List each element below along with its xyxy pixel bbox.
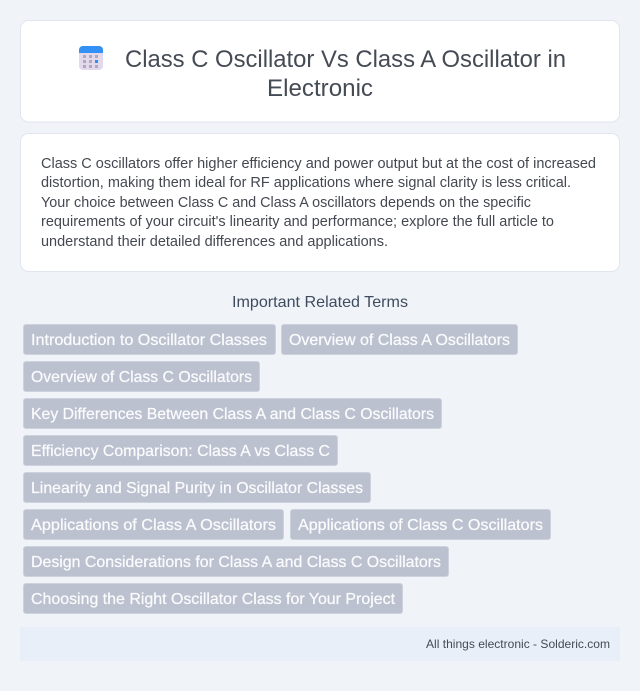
tag: overview class A: Overview of Class A Oscillators — [289, 332, 510, 349]
panel: summary text card: Your choice between Class C and Class A oscillators depends on the specific — [41, 195, 531, 211]
tag: applications class C — [290, 510, 550, 540]
tag: design considerations: Design Considerations for Class A and Class C Oscillators — [31, 554, 441, 571]
tag: linearity — [24, 472, 370, 502]
footer: All things electronic - Solderic.com — [426, 637, 610, 651]
tag: efficiency comparison: Efficiency Comparison: Class A vs Class C — [31, 443, 330, 460]
tag: applications class A: Applications of Class A Oscillators — [31, 517, 276, 534]
tag: key differences: Key Differences Between Class A and Class C Oscillators — [31, 406, 434, 423]
tag: overview class A — [282, 324, 518, 354]
tag: introduction: Introduction to Oscillator Classes — [31, 332, 267, 349]
tag: choosing — [24, 584, 402, 614]
panel: title card — [20, 20, 620, 122]
title — [125, 46, 566, 102]
tag: key differences — [24, 398, 442, 428]
tag: design considerations — [24, 546, 448, 576]
tag: overview class C — [24, 362, 260, 392]
panel: summary text card: understand their detailed differences and applications. — [41, 234, 388, 250]
tag: applications class C: Applications of Class C Oscillators — [298, 517, 543, 534]
title: Class C Oscillator Vs Class A Oscillator in — [125, 46, 566, 73]
icon: calendar — [79, 46, 103, 70]
tag: linearity: Linearity and Signal Purity in Oscillator Classes — [31, 480, 363, 497]
panel: summary text card — [20, 134, 620, 272]
tag: applications class A — [24, 510, 284, 540]
panel: summary text card: distortion, making them ideal for RF applications where signal clarity is less critical. — [41, 175, 571, 191]
title: Electronic — [267, 75, 373, 102]
footer — [20, 627, 620, 661]
tag: efficiency comparison — [24, 436, 338, 466]
panel: summary text card: Class C oscillators offer higher efficiency and power output but at the cost of increased — [41, 156, 596, 172]
heading: important related terms: Important Related Terms — [232, 294, 408, 311]
tag: overview class C: Overview of Class C Oscillators — [31, 369, 252, 386]
panel: summary text card: requirements of your circuit's linearity and performance; explore the full article to — [41, 214, 554, 230]
tag: choosing: Choosing the Right Oscillator Class for Your Project — [31, 591, 396, 608]
tag: introduction — [24, 324, 276, 354]
